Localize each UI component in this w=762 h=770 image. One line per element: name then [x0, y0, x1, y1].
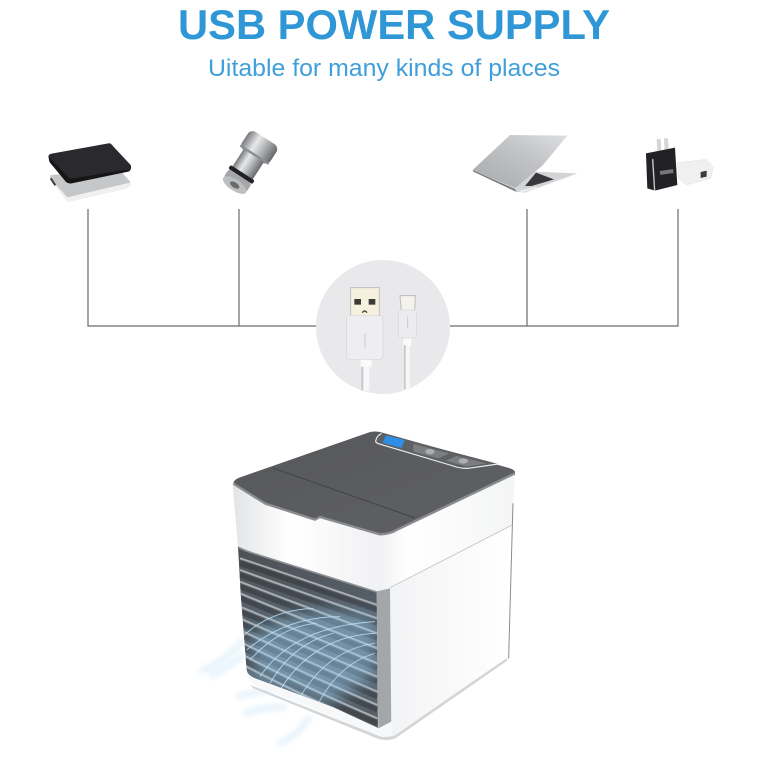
lcd display: [383, 435, 405, 448]
mist outside: [200, 640, 310, 745]
buttons: [413, 444, 449, 458]
body: [233, 473, 515, 737]
front grille: [233, 543, 391, 733]
slats: [240, 558, 377, 728]
icon: laptop: [473, 135, 577, 193]
connector lines: [88, 209, 678, 326]
subtitle: Uitable for many kinds of places: [208, 55, 560, 82]
right side panel: [390, 526, 512, 737]
usb-a plug: [347, 288, 383, 391]
circle background: [316, 260, 450, 394]
airflow streams: [243, 608, 375, 703]
lid: [233, 431, 515, 534]
ground shadow: [250, 657, 507, 740]
title: USB POWER SUPPLY: [178, 1, 610, 48]
top band: [233, 473, 515, 592]
usb cable in circle: [316, 260, 450, 394]
blue haze: [250, 610, 377, 707]
bottom base: [247, 672, 393, 737]
slat shadows: [240, 563, 377, 723]
icon: wall chargers: [646, 138, 713, 191]
icon: power bank: [48, 143, 131, 201]
air cooler: [200, 431, 515, 745]
control panel: [376, 433, 498, 469]
micro-usb plug: [399, 296, 417, 389]
icon: car charger: [217, 129, 279, 199]
